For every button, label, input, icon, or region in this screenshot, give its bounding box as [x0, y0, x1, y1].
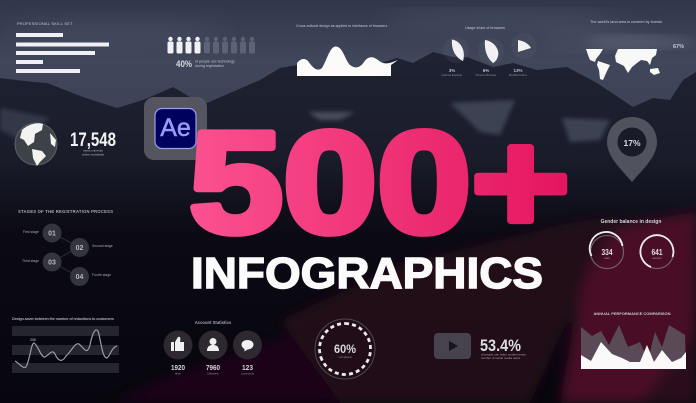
- peak label: 206: [30, 338, 36, 342]
- connectors: [52, 233, 79, 277]
- step numbers: 03: [48, 260, 56, 266]
- panel: people pictogram: during registration: [195, 64, 224, 68]
- pie labels: Mozilla Firefox: [509, 73, 528, 77]
- background: crimson slopes: [110, 212, 696, 403]
- icon: thumbs up: [171, 337, 184, 351]
- ring labels: men: [604, 256, 610, 260]
- heading: Account Statistics: [195, 320, 232, 325]
- continents: [20, 123, 56, 166]
- globe: [15, 123, 57, 165]
- heading: Gender balance in design: [601, 219, 661, 225]
- ring labels: women: [652, 256, 662, 260]
- panel: video stat: number of social media users: [481, 356, 521, 360]
- badge backing: [144, 97, 207, 160]
- icon row: people: [168, 37, 255, 54]
- pie slices: [452, 40, 531, 63]
- panel: area chart top: [296, 24, 398, 76]
- outer ring: [315, 319, 375, 379]
- heading: Design-saver between the number of reductions to customers: [12, 317, 114, 321]
- panel: video stat: [434, 333, 526, 360]
- pie labels: [442, 73, 528, 77]
- caption: completed: [339, 355, 352, 359]
- pie values: 6%: [483, 68, 489, 73]
- panel: globe stat: [15, 123, 116, 166]
- heading: Cross-cultural design as applied to interfaces of browsers: [296, 24, 387, 28]
- bars: [16, 33, 109, 73]
- line: [15, 330, 117, 367]
- step labels: First stage: [23, 230, 39, 234]
- dashed progress: [320, 324, 371, 374]
- ring values: 641: [652, 248, 663, 257]
- heading: PROFESSIONAL SKILL SET: [17, 22, 73, 26]
- step labels: [22, 230, 113, 277]
- step labels: Fourth stage: [92, 273, 111, 277]
- pin centre: [618, 128, 646, 156]
- value: 40%: [176, 59, 192, 69]
- panel: account statistics: [164, 320, 262, 376]
- icon: user: [207, 338, 219, 351]
- icon: video play: [434, 333, 471, 359]
- step labels: Third stage: [22, 259, 39, 263]
- panel: horizontal bar chart: [16, 22, 109, 73]
- icon: speech bubble: [242, 340, 254, 352]
- panel: globe stat: online worldwide: [82, 152, 104, 156]
- value: 60%: [334, 342, 356, 356]
- stat values: 123: [242, 363, 253, 372]
- pie labels: Chrome Browser: [476, 73, 497, 77]
- ring 2: [640, 236, 674, 268]
- step numbers: [48, 230, 83, 281]
- panel: annual performance chart: [581, 311, 686, 369]
- ring 1: [590, 236, 624, 268]
- pin shape: [607, 117, 657, 182]
- value: 67%: [673, 44, 684, 50]
- pie values: [449, 68, 523, 73]
- headline: 500+: 500+: [189, 102, 570, 263]
- ring values: [602, 248, 663, 257]
- ring values: 334: [602, 248, 613, 257]
- panel: people pictogram: [168, 37, 255, 69]
- icon circles: [164, 330, 262, 360]
- background: snow patches: [0, 100, 610, 142]
- heading: ANNUAL PERFORMANCE COMPARISON: [594, 311, 671, 316]
- panel: location pin: [607, 117, 657, 182]
- panel: registration stages: [18, 209, 113, 286]
- back area: [581, 325, 686, 369]
- panel: pie charts: [442, 26, 537, 77]
- step numbers: 04: [76, 274, 83, 281]
- panel: world map: [585, 20, 695, 80]
- heading: Usage share of browsers: [465, 26, 505, 30]
- value: 17%: [623, 138, 641, 148]
- value: 17,548: [70, 130, 116, 151]
- step circles: [42, 224, 89, 286]
- panel: gender balance: [590, 219, 674, 268]
- badge tile: [155, 108, 196, 148]
- white area: [297, 46, 398, 76]
- stat labels: [175, 372, 255, 376]
- cloud haze: [585, 35, 695, 49]
- stat values: 7960: [206, 363, 220, 372]
- step numbers: 01: [48, 230, 56, 238]
- panel: radial gauge: [315, 319, 375, 379]
- badge letters: Ae: [160, 114, 191, 142]
- front area: [581, 342, 686, 369]
- pie backdrops: [443, 33, 537, 64]
- stat labels: comments: [241, 372, 255, 376]
- heading: STAGES OF THE REGISTRATION PROCESS: [18, 209, 113, 214]
- stat values: [171, 363, 253, 372]
- step labels: Second stage: [92, 244, 113, 248]
- icon: After Effects badge: [144, 97, 207, 160]
- stat labels: followers: [207, 372, 219, 376]
- map continents: [586, 49, 660, 80]
- chart bands: [12, 326, 119, 373]
- ring labels: [604, 256, 662, 260]
- subheading: INFOGRAPHICS: INFOGRAPHICS: [191, 249, 543, 298]
- step numbers: 02: [76, 245, 83, 252]
- heading: The world's land area is covered by forests: [590, 20, 662, 24]
- pie values: 3%: [449, 68, 455, 73]
- panel: line chart: [12, 317, 119, 373]
- value: 53.4%: [480, 336, 521, 355]
- caption: of people use technology: [195, 60, 235, 64]
- pie values: 13%: [513, 68, 523, 73]
- stat labels: likes: [175, 372, 181, 376]
- caption: users currently: [83, 148, 103, 152]
- caption: of people use video content every: [481, 352, 526, 356]
- pie labels: Internet Explorer: [442, 73, 462, 77]
- stat values: 1920: [171, 363, 185, 372]
